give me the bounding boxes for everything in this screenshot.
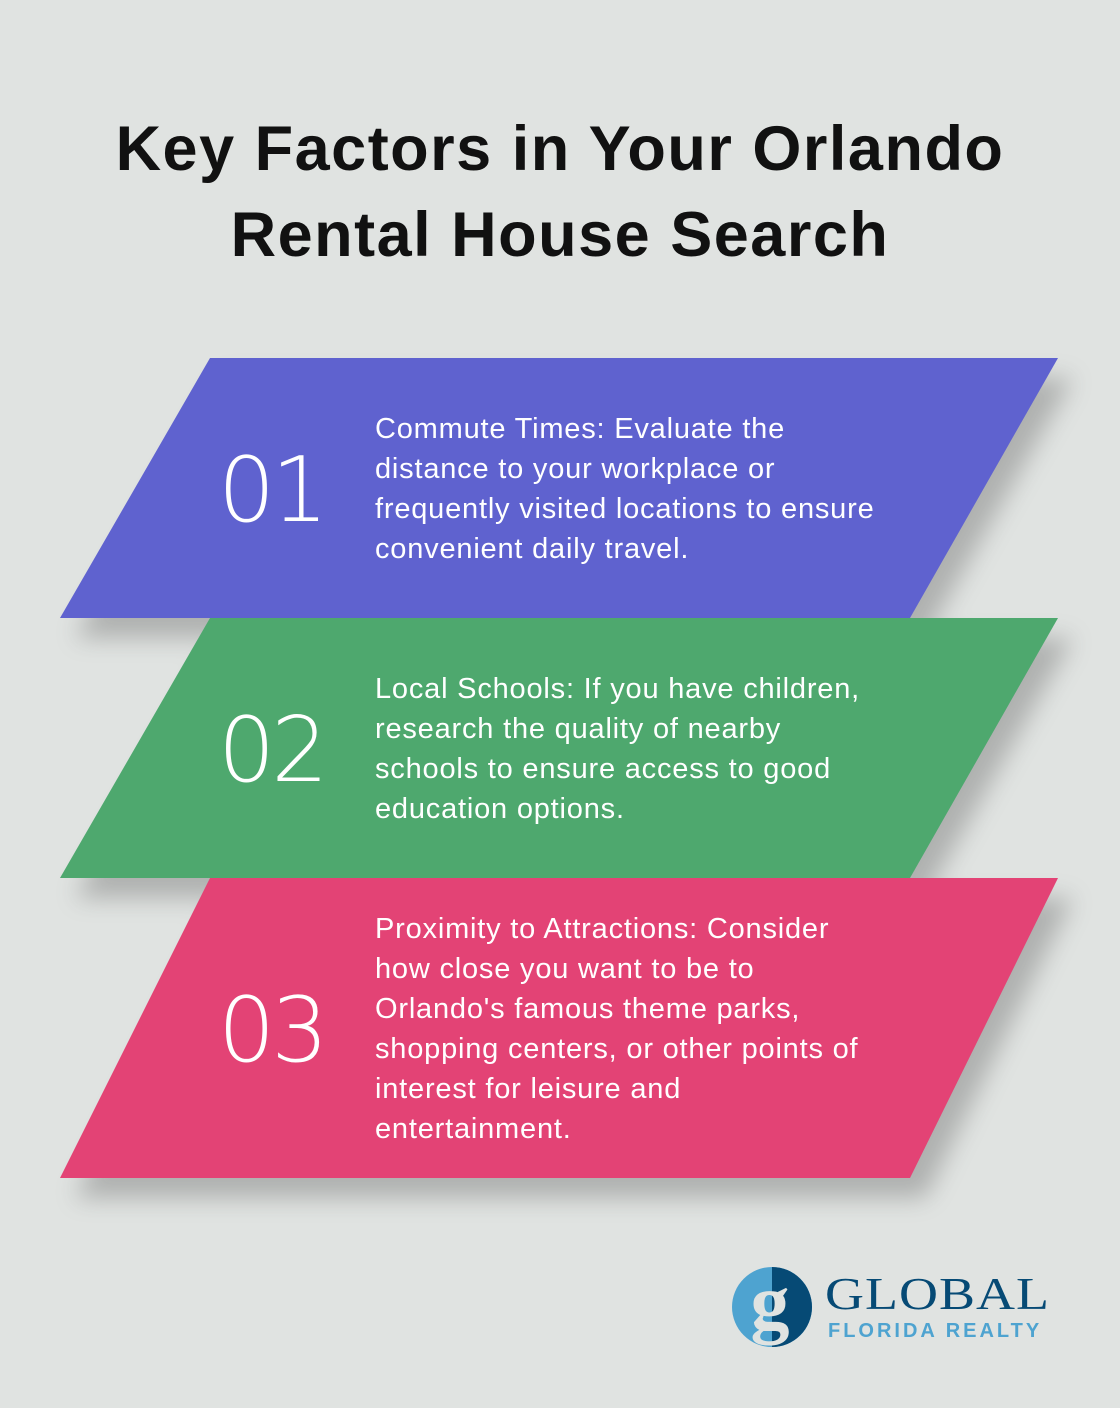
band 3: [60, 878, 1058, 1178]
title: Rental House Search: [231, 200, 889, 270]
band 1: [60, 358, 1058, 618]
text 3: how close you want to be to: [375, 953, 754, 985]
number 02: 02: [218, 698, 325, 803]
number 03: 03: [218, 978, 325, 1083]
text 3: [375, 913, 858, 1145]
band 2: [60, 618, 1058, 878]
title: Key Factors in Your Orlando: [116, 114, 1004, 184]
logo icon: [732, 1266, 812, 1347]
text 2: schools to ensure access to good: [375, 753, 831, 785]
text 2: education options.: [375, 793, 625, 825]
text 3: Proximity to Attractions: Consider: [375, 913, 829, 945]
text 2: research the quality of nearby: [375, 713, 781, 745]
text 2: Local Schools: If you have children,: [375, 673, 860, 705]
text 1: frequently visited locations to ensure: [375, 493, 874, 525]
text 3: entertainment.: [375, 1113, 572, 1145]
text 3: interest for leisure and: [375, 1073, 681, 1105]
logo: [732, 1266, 1050, 1347]
text 3: Orlando's famous theme parks,: [375, 993, 800, 1025]
logo: FLORIDA REALTY: [828, 1320, 1042, 1342]
text 2: [375, 673, 860, 825]
title: [116, 114, 1004, 270]
text 1: convenient daily travel.: [375, 533, 689, 565]
number 01: 01: [218, 438, 325, 543]
text 3: shopping centers, or other points of: [375, 1033, 858, 1065]
logo text: GLOBAL: [825, 1268, 1050, 1319]
text 1: Commute Times: Evaluate the: [375, 413, 785, 445]
text 1: distance to your workplace or: [375, 453, 775, 485]
text 1: [375, 413, 874, 565]
